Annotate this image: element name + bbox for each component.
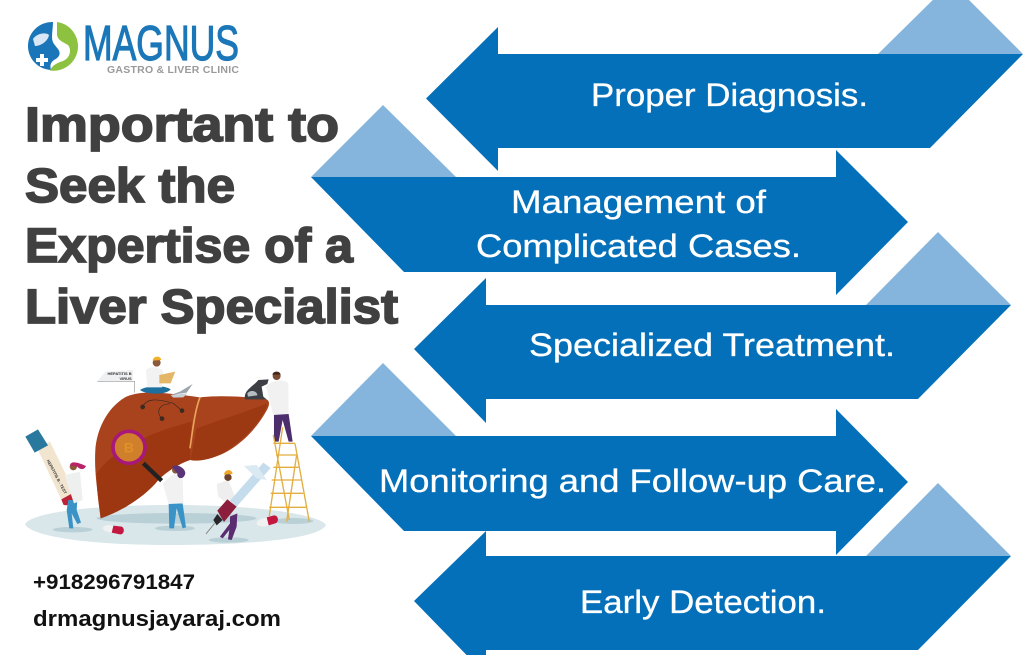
arrow 4: Monitoring and Follow-up Care	[311, 363, 908, 555]
title: Liver Specialist	[25, 280, 398, 334]
arrow label: Early Detection.	[580, 584, 826, 620]
ladder	[269, 427, 309, 522]
liver	[95, 392, 269, 518]
arrow 5: Early Detection	[414, 483, 1011, 655]
arrow label: Monitoring and Follow-up Care.	[379, 463, 886, 499]
title: Seek the	[25, 159, 235, 213]
arrow shape	[414, 278, 1011, 423]
arrow shape	[414, 531, 1011, 655]
fold triangle	[311, 105, 456, 177]
title	[25, 98, 398, 334]
doctor with test tube	[65, 462, 86, 528]
arrow shape	[311, 409, 908, 555]
fold triangle	[878, 0, 1023, 54]
pill right	[257, 515, 278, 526]
liver lower shading	[97, 422, 192, 518]
sign: hepatitis B virus: VIRUS	[119, 376, 132, 381]
arrow shape	[311, 150, 908, 295]
pill left	[103, 525, 124, 534]
scientist with microscope	[245, 372, 293, 442]
arrow label: Management of	[511, 184, 766, 220]
magnifier with hepatitis B virus: B	[124, 440, 134, 456]
magnifier with hepatitis B virus	[113, 431, 162, 481]
icon: clinic emblem	[28, 22, 78, 71]
scientist sitting with laptop	[140, 357, 193, 398]
arrow shape	[426, 27, 1023, 171]
title: Important to	[25, 98, 339, 152]
arrow label: Proper Diagnosis.	[591, 77, 868, 113]
arrow 2: Management of Complicated Cases	[311, 105, 908, 295]
website: drmagnusjayaraj.com	[33, 606, 281, 631]
arrow label	[476, 184, 801, 264]
ground ellipse	[25, 505, 326, 545]
doctor with syringe	[206, 463, 271, 540]
arrow label: Complicated Cases.	[476, 228, 801, 264]
title: Expertise of a	[25, 219, 354, 273]
test tube	[25, 429, 75, 505]
arrow 3: Specialized Treatment	[414, 232, 1011, 423]
arrow label: Specialized Treatment.	[529, 327, 895, 363]
phone number: +918296791847	[33, 571, 195, 594]
logo wordmark: MAGNUS	[83, 17, 239, 71]
fold triangle	[311, 363, 456, 436]
sign: hepatitis B virus	[97, 370, 135, 393]
liver ligament	[190, 397, 200, 448]
fold triangle	[866, 232, 1011, 305]
sign: hepatitis B virus: HEPATITIS B	[107, 371, 132, 376]
arrow 1: Proper Diagnosis	[426, 0, 1023, 171]
liver right lobe shading	[191, 403, 267, 460]
liver wires	[141, 400, 184, 421]
logo tagline: GASTRO & LIVER CLINIC	[107, 64, 239, 76]
logo: Magnus Gastro & Liver Clinic	[28, 17, 239, 76]
doctor with magnifier	[163, 465, 186, 528]
ground shadows	[53, 513, 313, 543]
fold triangle	[866, 483, 1011, 556]
test tube: HEPATITIS B - TEST	[46, 459, 68, 495]
illustration: liver with medical staff	[25, 357, 326, 545]
